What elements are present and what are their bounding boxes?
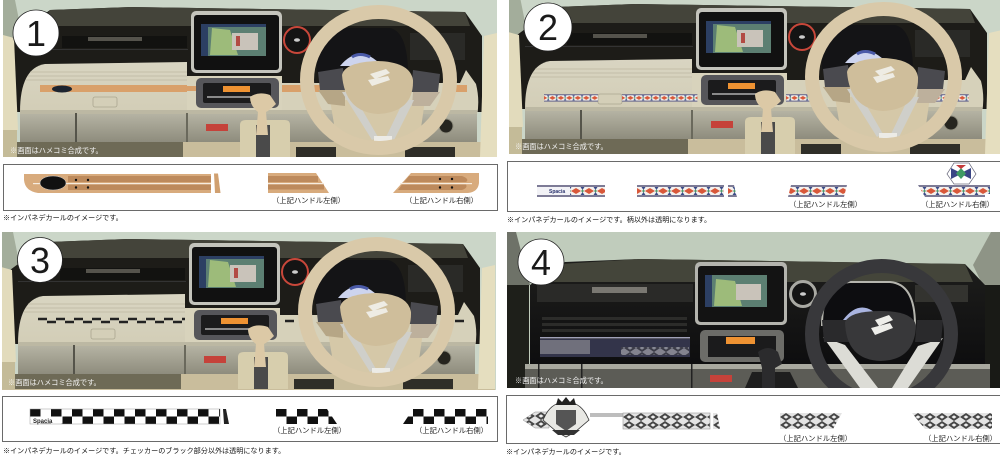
- photo note: ※画面はハメコミ合成です。: [10, 146, 103, 155]
- number badge 4: [518, 239, 564, 285]
- decal left strip with Spacia logo: Spacia: [549, 189, 565, 195]
- caption right of wheel: （上記ハンドル右側）: [924, 434, 997, 443]
- silver air vent: [790, 282, 816, 306]
- dashboard photo: [507, 232, 1000, 388]
- checker right of wheel: [403, 409, 488, 424]
- panel 3: option 3 dashboard with checker decal: [0, 232, 498, 455]
- checker strip with Spacia logo: [30, 409, 229, 425]
- decal centre piece: [268, 173, 329, 193]
- air vent with red ring: [284, 27, 310, 53]
- decal left of wheel: [780, 413, 842, 429]
- navigation screen: [189, 243, 280, 305]
- decal left strip with Spacia logo: [537, 185, 605, 197]
- panel 2: option 2 dashboard with tribal pattern decal: [505, 0, 1000, 224]
- caption left of wheel: （上記ハンドル左側）: [273, 426, 346, 435]
- decal centre strip: [637, 185, 737, 197]
- orange stripe decal on dashboard: [40, 85, 467, 92]
- footnote 1: ※インパネデカールのイメージです。: [3, 213, 123, 222]
- caption left of wheel: （上記ハンドル左側）: [789, 200, 862, 209]
- tribal pattern decal on dashboard: [544, 94, 969, 102]
- air vent with red ring: [789, 24, 815, 50]
- navigation screen: [191, 11, 282, 73]
- royal crest decal strip: [523, 397, 720, 437]
- navigation screen: [696, 8, 787, 70]
- checker strip with Spacia logo: Spacia: [33, 419, 53, 425]
- navigation screen: [695, 262, 787, 325]
- footnote 4: ※インパネデカールのイメージです。: [506, 447, 626, 456]
- decal sheet 1: [4, 164, 498, 210]
- number badge 1: [13, 10, 59, 56]
- caption left of wheel: （上記ハンドル左側）: [779, 434, 852, 443]
- decal right of wheel: [912, 413, 992, 429]
- number badge 2: [524, 3, 572, 51]
- decal sheet 2: [508, 162, 1000, 212]
- beige steering wheel: [305, 244, 448, 382]
- decal left of wheel: [788, 185, 847, 197]
- number badge 1: 1: [26, 13, 46, 54]
- decal sheet 4: [506, 396, 1000, 444]
- footnote 3: ※インパネデカールのイメージです。チェッカーのブラック部分以外は透明になります。: [3, 446, 285, 455]
- caption right of wheel: （上記ハンドル右側）: [415, 426, 488, 435]
- decal sheet 3: [2, 396, 498, 442]
- checker left of wheel: [276, 409, 337, 424]
- decal right of wheel: [918, 185, 990, 197]
- decal right piece: [393, 173, 479, 193]
- beige steering wheel: [812, 9, 955, 147]
- black steering wheel: [812, 266, 951, 402]
- panel 4: option 4 black dashboard with royal crest decal: [506, 232, 1000, 456]
- air vent with red ring: [282, 259, 308, 285]
- photo note: ※画面はハメコミ合成です。: [515, 142, 608, 151]
- dashboard photo: [0, 232, 498, 392]
- caption right of wheel: （上記ハンドル右側）: [405, 196, 478, 205]
- checker decal on dashboard: [38, 319, 470, 322]
- photo note: ※画面はハメコミ合成です。: [8, 378, 101, 387]
- footnote 2: ※インパネデカールのイメージです。柄以外は透明になります。: [507, 215, 711, 224]
- number badge 2: 2: [538, 7, 558, 48]
- number badge 3: 3: [30, 240, 50, 281]
- dashboard photo: [0, 0, 500, 160]
- number badge 3: [18, 238, 62, 282]
- panel 1: option 1 dashboard with orange stripe decal: [0, 0, 500, 222]
- caption right of wheel: （上記ハンドル右側）: [921, 200, 994, 209]
- caption left of wheel: （上記ハンドル左側）: [272, 196, 345, 205]
- decal left strip: [24, 174, 220, 193]
- photo note: ※画面はハメコミ合成です。: [515, 376, 608, 385]
- pattern detail icon: [947, 163, 976, 184]
- dashboard photo: [505, 0, 1000, 157]
- number badge 4: 4: [531, 242, 551, 283]
- beige steering wheel: [307, 12, 450, 150]
